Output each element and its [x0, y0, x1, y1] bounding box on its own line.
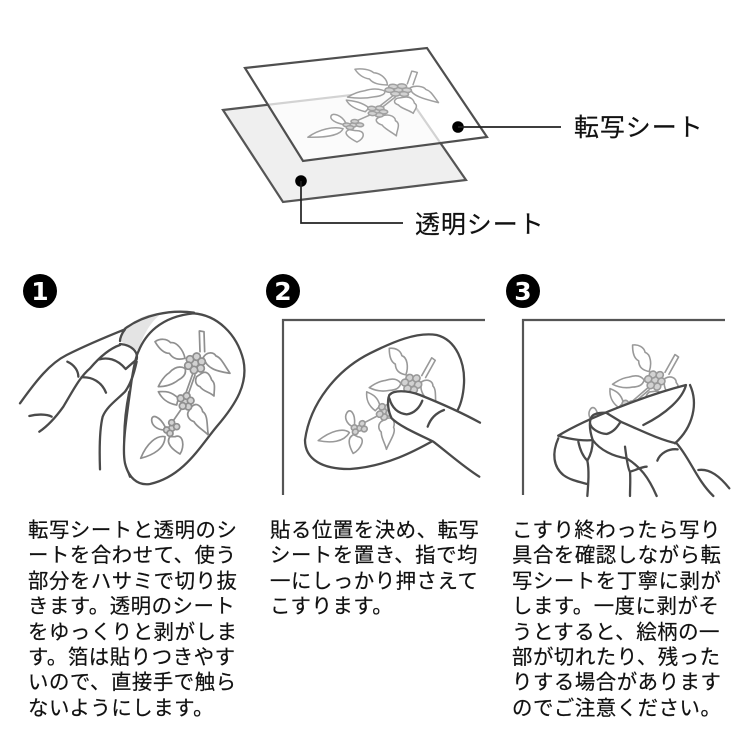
transfer sheet [245, 48, 487, 161]
text: step 1: 部分をハサミで切り抜 [28, 571, 237, 593]
text: step 3: します。一度に剥がそ [512, 596, 719, 618]
badge 2: 2 [274, 277, 292, 306]
badge 1 [23, 274, 57, 308]
text: step 3: りする場合があります [512, 672, 721, 694]
illustration 1: peeling the transparent sheet [20, 312, 244, 484]
transparent sheet [223, 89, 466, 202]
text: step 2: こすります。 [270, 596, 393, 618]
text: step 3 [512, 519, 721, 720]
hand [20, 329, 137, 469]
badge 3: 3 [514, 277, 532, 306]
badge 2 [266, 274, 300, 308]
text: step 1: す。箔は貼りつきやす [28, 647, 236, 669]
text: step 3: こすり終わったら写り [512, 520, 721, 542]
sheet body [305, 334, 464, 469]
text: step 1: ないようにします。 [28, 698, 214, 720]
sprig [141, 331, 230, 458]
label: transfer sheet: 転写シート [574, 114, 704, 142]
sheet body [124, 313, 244, 484]
text: step 2: シートを置き、指で均 [270, 545, 478, 567]
text: step 3: 具合を確認しながら転 [512, 545, 721, 567]
peeled sheet [120, 312, 194, 477]
text: step 3: うとすると、絵柄の一 [512, 622, 720, 644]
leader: transfer sheet [452, 121, 561, 133]
hand [388, 391, 490, 477]
sprig [561, 330, 701, 475]
text: step 1: 転写シートと透明のシ [28, 520, 237, 542]
diagram: layered sheets [223, 48, 561, 223]
text: step 3: 部が切れたり、残った [512, 647, 721, 669]
text: step 2 [270, 519, 479, 618]
label: transparent sheet: 透明シート [415, 211, 545, 239]
corner frame [283, 320, 485, 495]
hand and peeled sheet [540, 385, 729, 496]
illustration 3: peeling the transfer sheet [523, 320, 729, 496]
badge 3 [506, 274, 540, 308]
text: step 2: 一にしっかり押さえて [270, 571, 478, 593]
text: step 1: きます。透明のシート [28, 596, 235, 618]
illustration 2: rubbing the sheet [283, 320, 490, 495]
text: step 1: いので、直接手で触ら [28, 672, 237, 694]
text: step 1 [28, 519, 237, 720]
text: step 1: をゆっくりと剥がしま [28, 622, 237, 644]
text: step 3: のでご注意ください。 [512, 698, 721, 720]
text: step 1: ートを合わせて、使う [28, 545, 236, 567]
text: step 2: 貼る位置を決め、転写 [270, 520, 479, 542]
leader: transparent sheet [295, 175, 403, 223]
text: step 3: 写シートを丁寧に剥が [512, 571, 721, 593]
sprig [318, 333, 457, 478]
sprig on transfer sheet [308, 60, 449, 154]
corner frame [523, 320, 725, 495]
badge 1: 1 [31, 277, 49, 306]
